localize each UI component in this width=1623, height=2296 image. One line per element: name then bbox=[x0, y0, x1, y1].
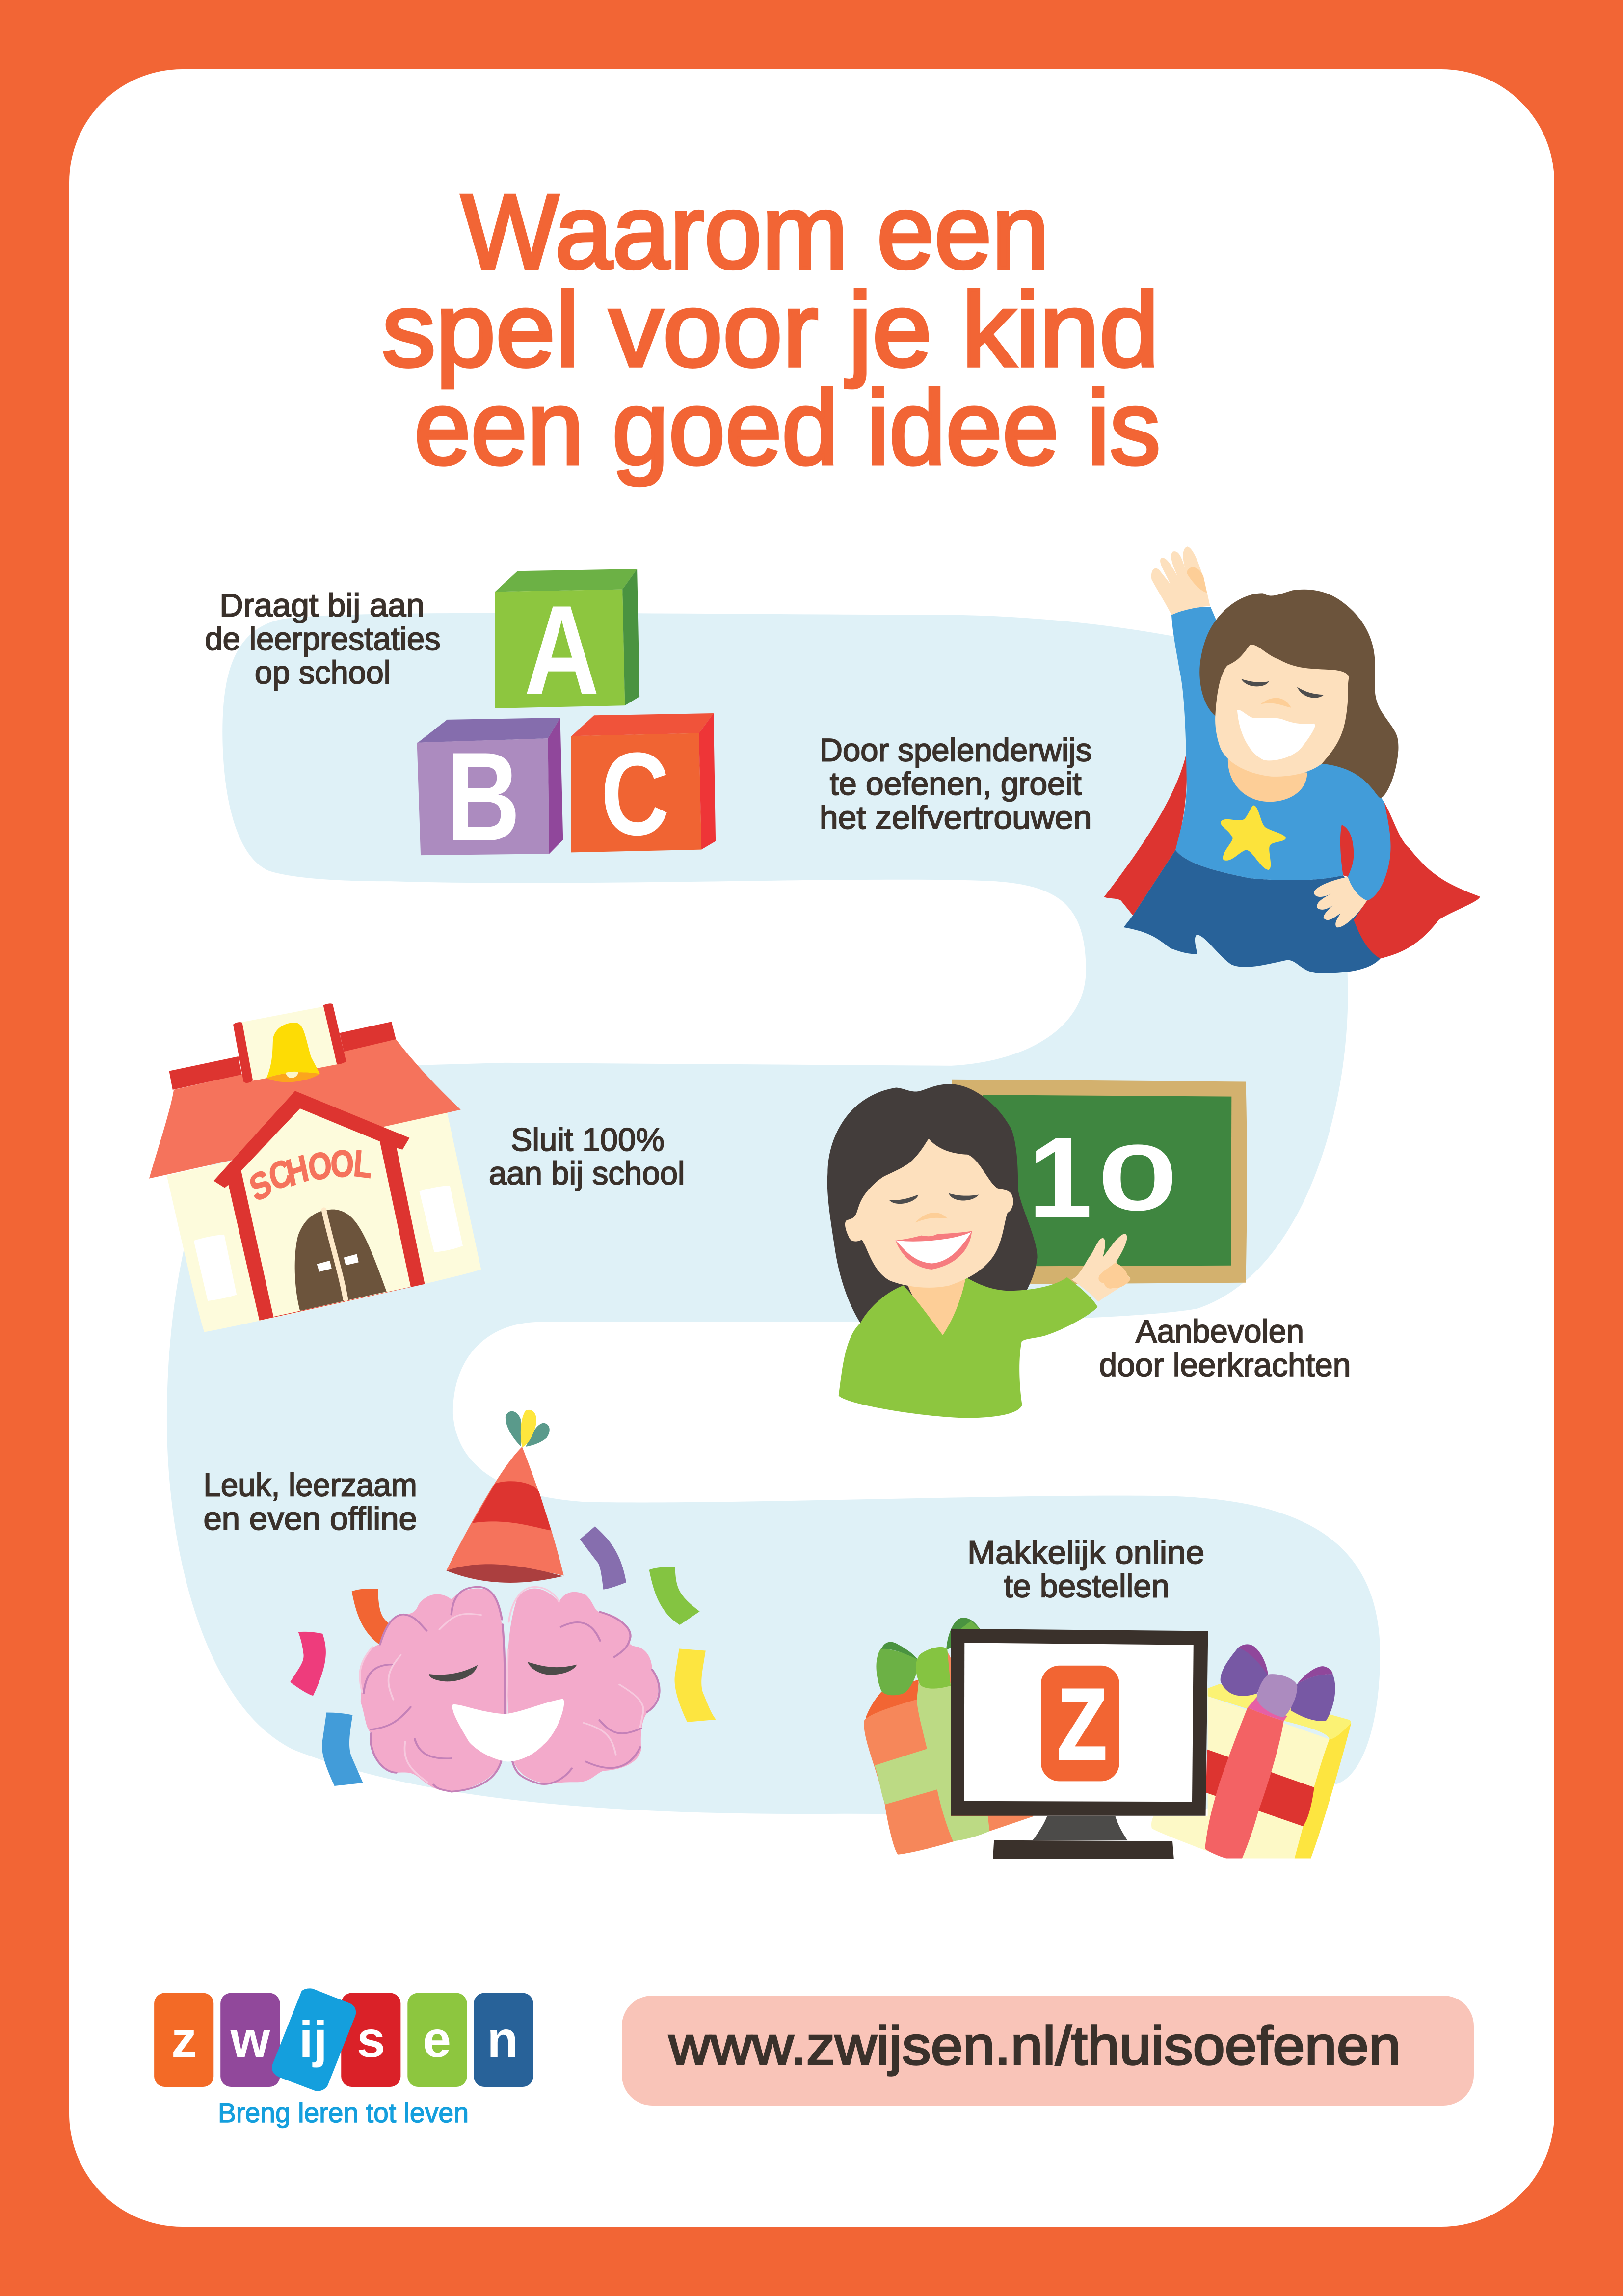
text: leerprestaties: op school bbox=[255, 655, 391, 691]
text: sluit aan bij school bbox=[489, 1122, 685, 1191]
logo: zwijsen: n bbox=[487, 2011, 518, 2068]
url banner: www.zwijsen.nl/thuisoefenen bbox=[668, 2016, 1401, 2076]
text: zelfvertrouwen: Door spelenderwijs bbox=[820, 732, 1092, 768]
logo: zwijsen: z bbox=[171, 2011, 197, 2068]
text: leuk leerzaam offline: en even offline bbox=[203, 1501, 417, 1537]
text: aanbevolen door leerkrachten: Aanbevolen bbox=[1136, 1313, 1304, 1349]
text: zelfvertrouwen: te oefenen, groeit bbox=[830, 766, 1082, 802]
text: zelfvertrouwen bbox=[820, 732, 1092, 836]
text: aanbevolen door leerkrachten bbox=[1099, 1313, 1351, 1383]
icon: school building bbox=[149, 1003, 481, 1332]
text: leuk leerzaam offline bbox=[203, 1467, 417, 1537]
title: Waarom een bbox=[461, 173, 1049, 291]
icon: superhero girl bbox=[1104, 546, 1480, 973]
logo: zwijsen: e bbox=[423, 2011, 451, 2068]
icon: ABC blocks: A bbox=[524, 579, 599, 721]
icon: ABC blocks: B bbox=[447, 726, 520, 867]
icon: party brain with confetti bbox=[290, 1410, 716, 1792]
logo: zwijsen: Breng leren tot leven bbox=[218, 2097, 469, 2128]
text: leuk leerzaam offline: Leuk, leerzaam bbox=[203, 1467, 417, 1503]
text: sluit aan bij school: aan bij school bbox=[489, 1155, 685, 1191]
icon: ABC blocks: C bbox=[601, 728, 669, 860]
text: sluit aan bij school: Sluit 100% bbox=[511, 1122, 665, 1158]
title bbox=[382, 173, 1161, 486]
text: leerprestaties: Draagt bij aan bbox=[219, 587, 425, 623]
title: een goed idee is bbox=[414, 369, 1161, 486]
logo: zwijsen bbox=[154, 1988, 533, 2128]
text: makkelijk online te bestellen: Makkelijk online bbox=[967, 1535, 1204, 1570]
text: makkelijk online te bestellen bbox=[967, 1535, 1204, 1604]
icon: monitor with gifts: Z bbox=[1058, 1668, 1107, 1781]
text: zelfvertrouwen: het zelfvertrouwen bbox=[820, 800, 1092, 836]
text: leerprestaties bbox=[205, 587, 441, 691]
title: spel voor je kind bbox=[382, 271, 1159, 388]
url banner bbox=[622, 1996, 1474, 2106]
logo: zwijsen: ij bbox=[299, 2011, 327, 2068]
icon: teacher at chalkboard: 0 bbox=[1101, 1128, 1174, 1227]
icon: school building: SCHOOL bbox=[244, 1142, 374, 1210]
logo: zwijsen: w bbox=[230, 2011, 271, 2068]
icon: ABC blocks bbox=[417, 569, 716, 867]
icon: teacher at chalkboard: 1 bbox=[1028, 1113, 1092, 1242]
text: makkelijk online te bestellen: te bestellen bbox=[1004, 1568, 1170, 1604]
icon: teacher at chalkboard bbox=[827, 1080, 1247, 1418]
logo: zwijsen: s bbox=[357, 2011, 385, 2068]
icon: monitor with gifts bbox=[864, 1618, 1352, 1859]
text: leerprestaties: de leerprestaties bbox=[205, 621, 441, 657]
text: aanbevolen door leerkrachten: door leerkrachten bbox=[1099, 1347, 1351, 1383]
winding light-blue path bbox=[167, 613, 1380, 1815]
